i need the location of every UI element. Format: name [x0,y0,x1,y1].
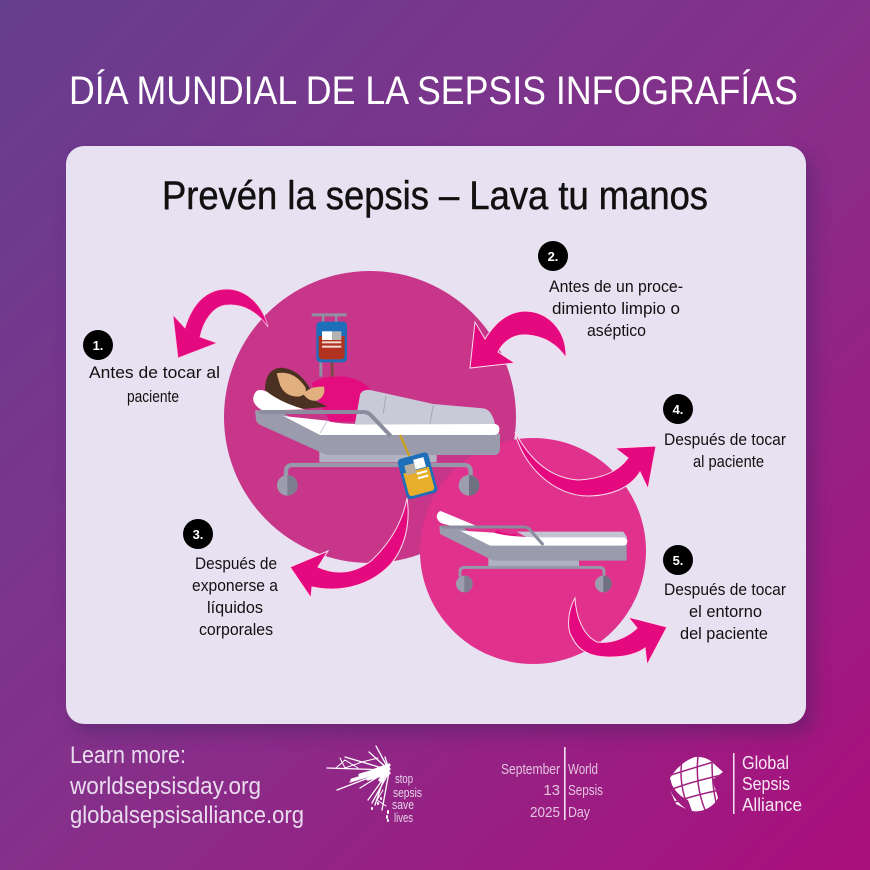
step 5: Después de tocar [664,581,786,599]
step 2: aséptico [587,322,646,340]
heading: Prevén la sepsis – Lava tu manos [162,174,708,218]
icon: drainage bag [397,435,438,500]
logo text: sepsis [393,786,422,800]
logo: world sepsis day date: Sepsis [568,782,603,799]
logo: world sepsis day date: September [501,761,560,778]
logo: world sepsis day date: Day [568,804,590,821]
step 3: 3. [193,527,203,542]
arrow 4 [515,432,656,496]
step 3 [183,519,279,639]
step 1: Antes de tocar al [89,364,220,382]
logo: world sepsis day date: 2025 [530,804,560,821]
step 1: 1. [93,338,103,353]
step 5: 5. [673,553,683,568]
illustration: patient on bed with IV [253,313,500,500]
arrow 2 [470,311,566,368]
step 3: líquidos [207,599,263,617]
arrow 1 [173,289,268,358]
circle: patient surroundings [420,438,646,664]
footer: learn more links: Learn more: [70,742,186,769]
step 4: Después de tocar [664,431,786,449]
icon: patient [265,368,495,425]
circle: patient zone [224,271,516,563]
logo: stop sepsis save lives [327,746,422,825]
step 3: exponerse a [192,577,279,595]
icon: bed [253,390,500,496]
logo text: Alliance [742,795,802,815]
logo text [392,772,422,825]
step 1 [83,330,220,406]
logo: world sepsis day date: World [568,761,598,778]
logo text [742,753,802,815]
step 5: el entorno [689,603,762,621]
icon: bed rail [259,412,391,436]
logo: world sepsis day date [501,747,603,821]
logo text: stop [395,772,413,786]
step 3: Después de [195,555,277,573]
logo: Global Sepsis Alliance [668,753,802,815]
step 2: Antes de un proce- [549,278,683,296]
step 4: 4. [673,402,683,417]
step 2: 2. [548,249,558,264]
illustration: empty bed [437,511,627,592]
logo: world sepsis day date: 13 [543,782,560,799]
logo text: Global [742,753,789,773]
step 5: del paciente [680,625,768,643]
title: DÍA MUNDIAL DE LA SEPSIS INFOGRAFÍAS [69,68,798,113]
logo text: Sepsis [742,774,790,794]
step 1: paciente [127,388,179,406]
step 5 [663,545,786,643]
step 4: al paciente [693,453,764,471]
icon: IV pole [312,313,347,377]
footer: learn more links [69,742,304,829]
step 3: corporales [199,621,273,639]
step 4 [663,394,786,471]
icon: globe [668,756,723,812]
step 2: dimiento limpio o [552,300,680,318]
footer: learn more links: worldsepsisday.org [69,773,261,800]
footer: learn more links: globalsepsisalliance.org [70,802,304,829]
logo text: lives [394,811,413,825]
logo text: save [392,798,414,812]
icon: splash [327,746,389,821]
panel: hand washing [66,146,806,724]
step 2 [538,241,683,340]
arrow 5 [569,598,667,665]
arrow 3 [290,498,408,598]
